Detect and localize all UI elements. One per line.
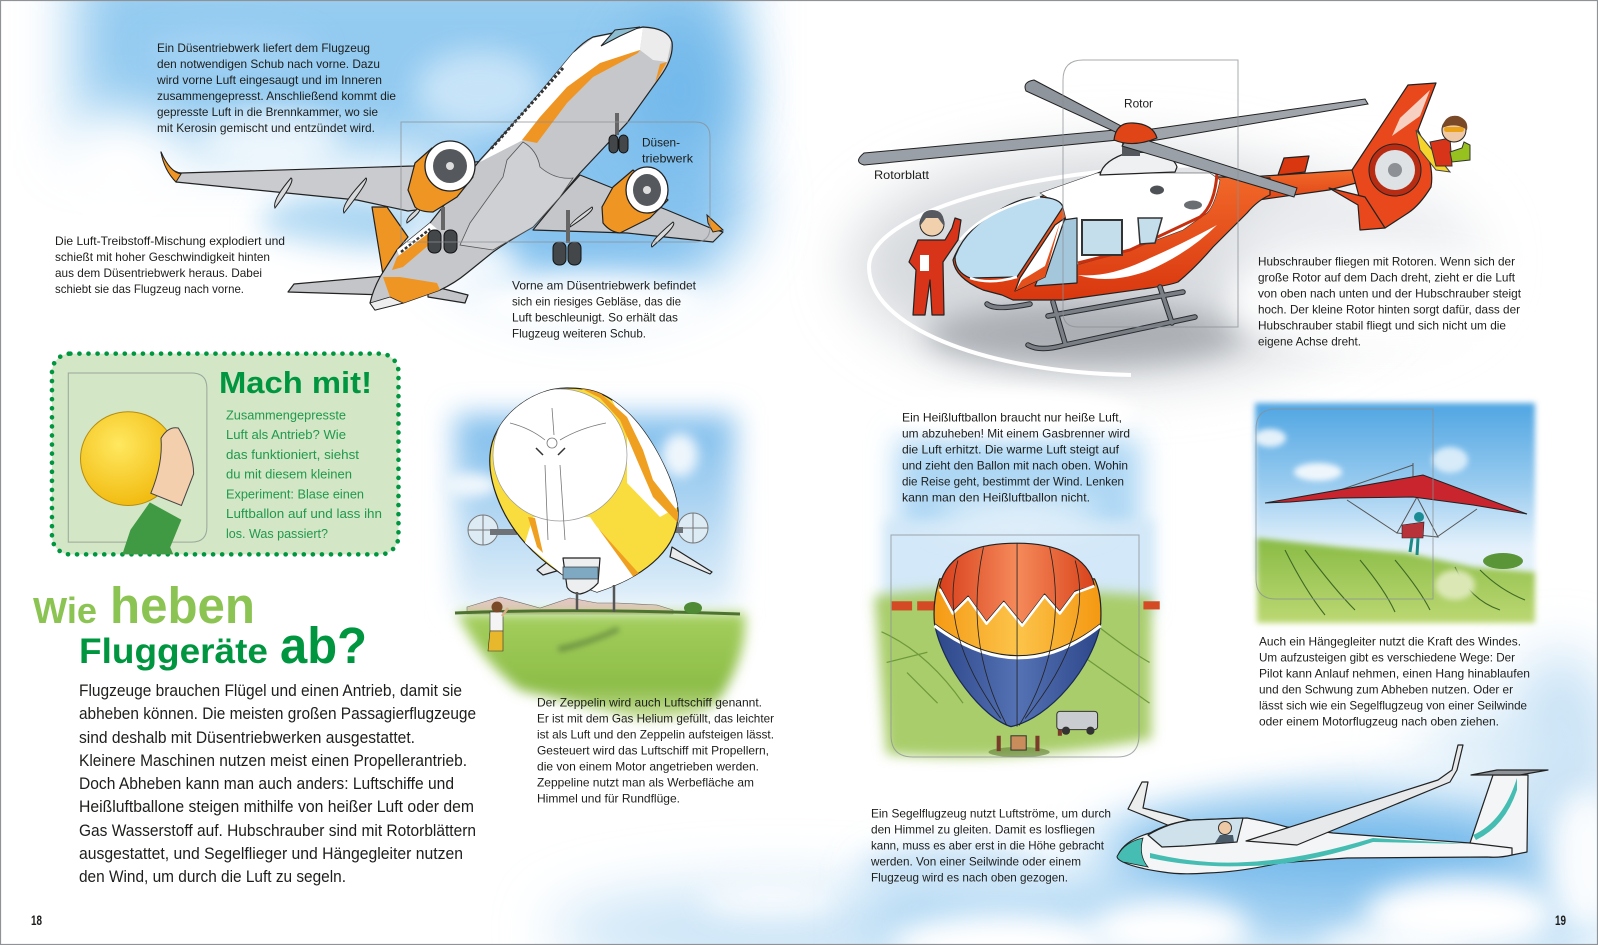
balloon white bands <box>940 586 1095 626</box>
text: experiment: du mit diesem kleinen <box>226 466 352 482</box>
text: exhaust mixture: schießt mit hoher Geschwindigkeit hinten <box>55 250 270 264</box>
box fill and dotted border <box>52 354 398 554</box>
text: hot air balloon: um abzuheben! Mit einem Gasbrenner wird <box>902 426 1130 440</box>
plane white upper fuselage <box>480 28 643 162</box>
sky background: top left <box>10 0 750 345</box>
zeppelin bush <box>684 602 702 614</box>
text: glider: den Himmel zu gleiten. Damit es losfliegen <box>871 822 1095 836</box>
plane fuselage <box>370 27 672 310</box>
text: hang glider: Pilot kann Anlauf nehmen, einen Hang hinablaufen <box>1259 666 1530 680</box>
balloon village <box>892 601 1160 610</box>
illustration: hang glider scene <box>1254 403 1535 623</box>
inner picture frame <box>68 373 207 542</box>
background: clouds centre bottom <box>550 882 1010 945</box>
text: hang glider <box>1259 634 1530 728</box>
zeppelin grass shadow <box>557 627 620 652</box>
off-road vehicle <box>1057 711 1098 735</box>
plane flap fairings <box>275 178 674 247</box>
text: hot air balloon: die Reise geht, bestimmt der Wind. Lenken <box>902 474 1124 488</box>
hang glider sky <box>1255 403 1535 573</box>
rotor hub <box>1114 123 1157 144</box>
text: zeppelin: Himmel und für Rundflüge. <box>537 792 680 806</box>
callout frame: balloon <box>891 535 1139 757</box>
text: experiment: Luftballon auf und lass ihn <box>226 506 382 521</box>
zeppelin lower orange stripes <box>528 517 639 576</box>
helicopter white belly streak <box>1078 225 1217 279</box>
hang glider meadow <box>1257 538 1535 623</box>
text: glider: werden. Von einer Seilwinde oder einem <box>870 854 1081 868</box>
plane right engine <box>602 170 668 233</box>
text: fan <box>512 278 697 340</box>
label: Düsentriebwerk: Düsen- <box>642 136 680 150</box>
text: experiment: los. Was passiert? <box>226 526 328 541</box>
helicopter engine housing <box>1100 152 1177 175</box>
balloon sky <box>897 438 1141 611</box>
glider nose <box>1117 838 1148 867</box>
text: glider: kann, muss es aber erst in die Höhe gebracht <box>871 838 1105 852</box>
plane tail tip <box>370 297 403 310</box>
text: helicopter: von oben nach unten und der Hubschrauber steigt <box>1258 286 1522 300</box>
zeppelin hills <box>467 597 673 614</box>
text: zeppelin: Der Zeppelin wird auch Luftschiff genannt. <box>537 696 762 710</box>
hang glider wires <box>1340 463 1477 537</box>
tail rotor fan <box>1369 144 1421 196</box>
text: hang glider: Auch ein Hängegleiter nutzt die Kraft des Windes. <box>1259 634 1521 648</box>
plane tail orange band <box>383 277 440 303</box>
icon: green sleeve <box>122 502 181 554</box>
zeppelin propellers <box>468 513 708 545</box>
helicopter side windows <box>1082 220 1122 255</box>
text: experiment: Zusammengepresste <box>226 408 346 422</box>
icon: hand holding balloon <box>151 428 194 505</box>
text: fan: Flugzeug weiteren Schub. <box>512 326 646 340</box>
text: hang glider: Um aufzusteigen gibt es verschiedene Wege: Der <box>1259 650 1515 664</box>
helipad shadow <box>850 150 1390 380</box>
label: Rotor: Rotor <box>1124 96 1153 110</box>
hang glider bush <box>1483 553 1523 569</box>
text: zeppelin <box>537 696 774 806</box>
plane stabilisers <box>288 276 468 303</box>
text: intro paragraph: Flugzeuge brauchen Flügel und einen Antrieb, damit sie <box>79 681 462 700</box>
title: Wie heben Fluggeräte ab?: Fluggeräte <box>79 632 268 671</box>
hang glider wing <box>1265 475 1527 514</box>
text: jet engine thrust: wird vorne Luft eingesaugt und im Inneren <box>156 73 382 87</box>
illustration: hot air balloon scene <box>874 390 1160 757</box>
zeppelin panels <box>493 388 685 595</box>
plane right winglet <box>707 215 723 232</box>
text: helicopter: hoch. Der kleine Rotor hinten sorgt dafür, dass der <box>1258 302 1520 316</box>
illustration: glider plane <box>1117 745 1548 874</box>
callout frame: hang glider <box>1256 409 1433 599</box>
panel: Mach mit box <box>52 354 398 554</box>
plane left engine <box>408 148 473 212</box>
plane landing gear <box>428 113 628 265</box>
glider left wing <box>1128 782 1190 826</box>
balloon landscape <box>874 589 1152 757</box>
zeppelin fins <box>537 547 712 575</box>
title: Wie heben Fluggeräte ab? <box>33 577 367 674</box>
superhero boy <box>1416 116 1470 172</box>
background: clouds bottom right <box>860 650 1598 945</box>
callout frame: rotor <box>1063 60 1238 327</box>
page number 19: 19 <box>1555 912 1566 928</box>
text: intro paragraph: Gas Wasserstoff auf. Hubschrauber sind mit Rotorblättern <box>79 821 476 840</box>
text: glider <box>870 806 1111 884</box>
text: experiment: das funktioniert, siehst <box>226 447 359 462</box>
zeppelin horizon <box>455 611 740 614</box>
text: jet engine thrust: zusammengepresst. Anschließend kommt die <box>157 89 396 103</box>
text: exhaust mixture: Die Luft-Treibstoff-Mischung explodiert und <box>55 234 285 248</box>
helicopter red body stripe <box>1078 173 1217 263</box>
heading: Mach mit: Mach mit! <box>219 365 372 400</box>
balloon blue lower panel <box>935 624 1101 727</box>
glider tail plane <box>1471 770 1548 775</box>
text: fan: Vorne am Düsentriebwerk befindet <box>512 278 697 292</box>
zeppelin nose cap <box>493 389 627 521</box>
balloon envelope <box>934 543 1101 727</box>
helicopter pilot <box>909 210 961 315</box>
callout frame: engine <box>401 122 710 242</box>
text: hot air balloon: Ein Heißluftballon braucht nur heiße Luft, <box>902 410 1122 424</box>
text: intro paragraph <box>79 681 476 886</box>
helipad white ring <box>869 165 1207 375</box>
plane rear white and windows <box>397 223 437 258</box>
text: helicopter: Hubschrauber fliegen mit Rotoren. Wenn sich der <box>1258 254 1515 268</box>
text: hot air balloon: die Luft erhitzt. Die warme Luft steigt auf <box>902 442 1120 456</box>
helicopter skids <box>987 287 1195 348</box>
text: intro paragraph: Kleinere Maschinen nutzen meist einen Propellerantrieb. <box>79 751 467 770</box>
hang glider pilot <box>1402 512 1424 555</box>
text: jet engine thrust <box>156 41 396 135</box>
text: glider: Ein Segelflugzeug nutzt Luftströme, um durch <box>871 806 1111 820</box>
label: Düsentriebwerk <box>642 136 694 166</box>
text: exhaust mixture: schiebt sie das Flugzeug nach vorne. <box>55 282 244 296</box>
helicopter dark vents <box>1150 186 1164 194</box>
helicopter fuselage <box>953 172 1270 300</box>
illustration: jet airliner <box>161 27 723 310</box>
text: intro paragraph: abheben können. Die meisten großen Passagierflugzeuge <box>79 704 476 723</box>
text: helicopter: eigene Achse dreht. <box>1258 334 1361 348</box>
text: intro paragraph: ausgestattet, und Segelflieger und Hängegleiter nutzen <box>79 844 463 863</box>
zeppelin landing struts <box>577 585 614 612</box>
text: jet engine thrust: den notwendigen Schub nach vorne. Dazu <box>157 57 380 71</box>
text: zeppelin: Er ist mit dem Gas Helium gefüllt, das leichter <box>537 712 774 726</box>
glider canopy <box>1148 818 1243 847</box>
balloon red top panel <box>940 543 1095 624</box>
text: intro paragraph: sind deshalb mit Düsentriebwerken ausgestattet. <box>79 728 415 747</box>
text: exhaust mixture <box>55 234 285 296</box>
label: Rotorblatt: Rotorblatt <box>874 168 930 182</box>
text: hot air balloon: kann man den Heißluftballon nicht. <box>902 490 1090 504</box>
plane windows <box>490 68 563 150</box>
text: zeppelin: ist als Luft und den Zeppelin aufsteigen lässt. <box>537 728 774 742</box>
helicopter cockpit frame <box>960 197 1040 281</box>
plane upper orange stripe <box>522 50 640 143</box>
text: hang glider: lässt sich wie ein Segelflugzeug von einer Seilwinde <box>1259 698 1527 712</box>
text: jet engine thrust: gepresste Luft in die Brennkammer, wo sie <box>157 105 378 119</box>
zeppelin lower white panel <box>525 517 640 595</box>
helicopter door <box>1015 218 1065 291</box>
plane left wing <box>161 152 505 211</box>
glider main wing <box>1246 745 1463 845</box>
text: hang glider: oder einem Motorflugzeug nach oben ziehen. <box>1259 714 1499 728</box>
plane wing body fairing <box>460 142 573 250</box>
glider fin stripes <box>1473 778 1517 840</box>
text: intro paragraph: den Wind, um durch die Luft zu segeln. <box>79 867 346 886</box>
helicopter white upper body <box>1040 173 1220 265</box>
plane right wing <box>533 175 723 242</box>
zeppelin upper orange stripe <box>580 388 682 523</box>
helicopter lower stabiliser <box>1329 188 1385 230</box>
icon: yellow balloon <box>81 412 176 505</box>
text: fan: Luft beschleunigt. So erhält das <box>512 310 678 324</box>
plane cockpit windows <box>601 27 640 46</box>
text: experiment: Experiment: Blase einen <box>226 486 364 502</box>
plane rear orange stripe <box>392 232 437 270</box>
text: jet engine thrust: mit Kerosin gemischt und entzündet wird. <box>157 121 375 135</box>
plane nose <box>640 28 671 62</box>
text: hot air balloon <box>902 410 1130 504</box>
illustration: helicopter scene <box>850 80 1530 380</box>
illustration: zeppelin scene <box>442 388 745 720</box>
text: zeppelin: die von einem Motor angetrieben werden. <box>537 760 759 774</box>
balloon seams <box>953 543 1080 727</box>
text: intro paragraph: Doch Abheben kann man auch anders: Luftschiffe und <box>79 774 454 793</box>
zeppelin sky <box>455 415 735 610</box>
text: hot air balloon: und zieht den Ballon mit nach oben. Wohin <box>902 458 1128 472</box>
plane nose orange accent <box>655 62 667 83</box>
text: helicopter <box>1258 254 1522 348</box>
title: Wie heben Fluggeräte ab?: heben <box>110 577 255 634</box>
main rotor mast <box>1122 140 1140 156</box>
text: glider: Flugzeug wird es nach oben gezogen. <box>871 870 1068 884</box>
page number 18: 18 <box>31 912 42 928</box>
balloon fields <box>882 611 1150 703</box>
text: intro paragraph: Heißluftballone steigen mithilfe von heißer Luft oder dem <box>79 797 474 816</box>
text: jet engine thrust: Ein Düsentriebwerk liefert dem Flugzeug <box>157 41 370 55</box>
text: zeppelin: Gesteuert wird das Luftschiff mit Propellern, <box>537 744 769 758</box>
hang glider pale grass patch <box>1435 570 1475 600</box>
helicopter tail fin <box>1352 83 1436 228</box>
glider pilot <box>1215 822 1234 843</box>
text: hang glider: und den Schwung zum Abheben nutzen. Oder er <box>1259 682 1513 696</box>
text: helicopter: Hubschrauber stabil fliegt und sich nicht um die <box>1258 318 1506 332</box>
plane left winglet <box>161 152 181 182</box>
balloon basket and crew <box>989 721 1060 757</box>
glider teal stripe <box>1150 838 1468 866</box>
glider fin <box>1470 775 1528 855</box>
text: zeppelin: Zeppeline nutzt man als Werbefläche am <box>537 776 754 790</box>
helicopter cockpit glass <box>955 197 1063 278</box>
glider fuselage <box>1117 818 1512 874</box>
zeppelin envelope <box>490 388 678 592</box>
text: fan: sich ein riesiges Gebläse, das die <box>512 294 681 308</box>
zeppelin meadow <box>457 613 745 720</box>
main rotor blades <box>858 80 1368 197</box>
helicopter door opening <box>1035 218 1077 286</box>
helicopter tail boom <box>1230 170 1360 212</box>
zeppelin upper white panel <box>612 400 678 517</box>
balloon orange middle panel <box>934 579 1101 656</box>
zeppelin gondola <box>563 558 600 594</box>
zeppelin ground crew <box>488 602 508 651</box>
zeppelin cap details <box>510 408 606 540</box>
title: Wie heben Fluggeräte ab?: ab? <box>280 617 367 674</box>
text: experiment <box>226 408 382 541</box>
plane tail fin <box>372 207 408 275</box>
text: experiment: Luft als Antrieb? Wie <box>226 427 346 442</box>
helicopter fin highlight <box>1392 90 1430 136</box>
helicopter small tail fin <box>1278 156 1309 175</box>
text: exhaust mixture: aus dem Düsentriebwerk heraus. Dabei <box>55 266 262 280</box>
label: Düsentriebwerk: triebwerk <box>642 152 694 166</box>
text: helicopter: große Rotor auf dem Dach dreht, zieht er die Luft <box>1258 270 1516 284</box>
hang glider meadow furrows <box>1285 550 1525 615</box>
title: Wie heben Fluggeräte ab?: Wie <box>33 590 97 631</box>
